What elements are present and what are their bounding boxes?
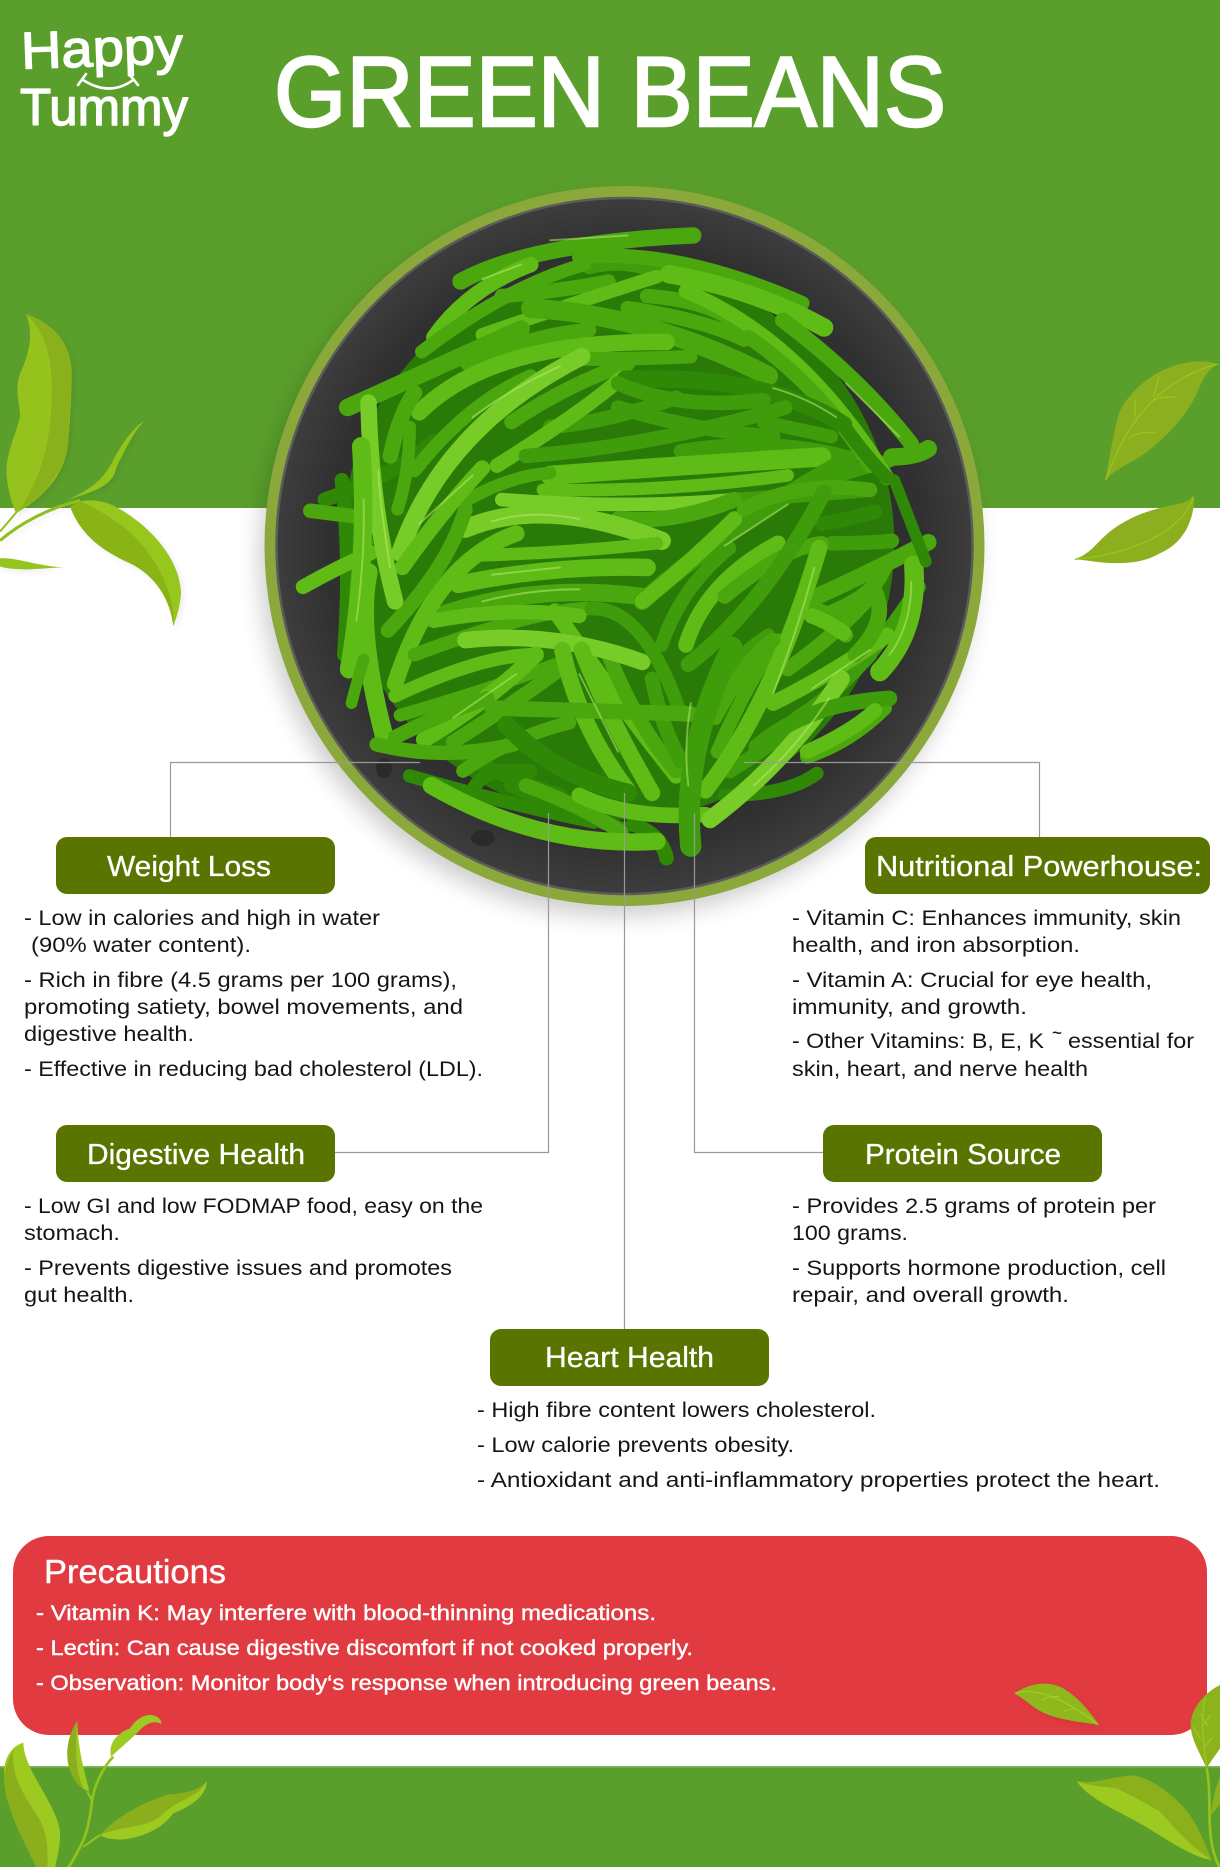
body text: - Low GI and low FODMAP food, easy on the <box>24 1195 483 1218</box>
logo: Happy Tummy <box>20 17 188 137</box>
body text: gut health. <box>24 1284 134 1307</box>
body text: - Provides 2.5 grams of protein per <box>792 1195 1156 1218</box>
connector lines <box>170 762 1040 1329</box>
pill heading: Weight Loss <box>107 851 271 883</box>
logo: Happy Tummy: Happy <box>20 17 184 81</box>
body text: 100 grams. <box>792 1222 908 1245</box>
panel: Heart Health <box>477 1329 1160 1492</box>
plate rim <box>264 186 984 906</box>
body text: - Antioxidant and anti-inflammatory properties protect the heart. <box>477 1469 1160 1492</box>
leaves: bottom left sprig <box>4 1715 207 1867</box>
body text: digestive health. <box>24 1023 194 1046</box>
precautions list: - Observation: Monitor body‘s response when introducing green beans. <box>36 1672 777 1695</box>
body text: health, and iron absorption. <box>792 934 1080 957</box>
pill heading <box>823 1125 1102 1182</box>
pill heading <box>490 1329 769 1386</box>
precautions heading: Precautions <box>44 1553 226 1590</box>
header green band <box>0 0 1220 508</box>
body text <box>477 1399 1160 1492</box>
body text: essential for <box>1068 1030 1194 1053</box>
body text <box>792 1195 1166 1307</box>
body text: repair, and overall growth. <box>792 1284 1069 1307</box>
leaves: left cluster <box>0 314 181 626</box>
pan <box>276 198 972 894</box>
precautions list: - Lectin: Can cause digestive discomfort if not cooked properly. <box>36 1637 693 1660</box>
body text: ~ <box>1052 1022 1062 1045</box>
body text: - Other Vitamins: B, E, K <box>792 1030 1044 1053</box>
body text: skin, heart, and nerve health <box>792 1058 1088 1081</box>
title: GREEN BEANS <box>274 36 946 147</box>
body text <box>24 907 483 1081</box>
leaf on precautions panel <box>1014 1684 1099 1725</box>
body text <box>24 1195 483 1307</box>
body text: - Effective in reducing bad cholesterol (LDL). <box>24 1058 483 1081</box>
body text: (90% water content). <box>31 934 251 957</box>
body text: promoting satiety, bowel movements, and <box>24 996 463 1019</box>
pill heading: Digestive Health <box>87 1139 305 1171</box>
body text: - Vitamin A: Crucial for eye health, <box>792 969 1152 992</box>
panel: Weight Loss <box>24 837 483 1081</box>
precautions list: - Vitamin K: May interfere with blood-thinning medications. <box>36 1602 656 1625</box>
pill heading: Protein Source <box>865 1139 1061 1171</box>
panel: Nutritional Powerhouse <box>792 837 1210 1081</box>
precautions list <box>36 1602 777 1695</box>
body text: - High fibre content lowers cholesterol. <box>477 1399 876 1422</box>
beans <box>303 235 928 858</box>
pill heading <box>865 837 1210 894</box>
leaves: right pair <box>1074 361 1219 563</box>
leaves: bottom right sprig <box>1077 1685 1220 1867</box>
body text: - Low in calories and high in water <box>24 907 380 930</box>
body text <box>792 907 1194 1081</box>
body text: - Supports hormone production, cell <box>792 1257 1166 1280</box>
logo: Happy Tummy: Tummy <box>20 79 188 137</box>
pill heading: Nutritional Powerhouse: <box>876 851 1202 883</box>
panel: Precautions <box>13 1536 1207 1735</box>
plate with green beans <box>260 186 984 916</box>
panel: Protein Source <box>792 1125 1166 1307</box>
body text: - Rich in fibre (4.5 grams per 100 grams), <box>24 969 457 992</box>
body text: - Low calorie prevents obesity. <box>477 1434 794 1457</box>
pill heading <box>56 1125 335 1182</box>
panel: Digestive Health <box>24 1125 483 1307</box>
body text: immunity, and growth. <box>792 996 1027 1019</box>
footer green band <box>0 1766 1220 1867</box>
body text: - Vitamin C: Enhances immunity, skin <box>792 907 1181 930</box>
body text: - Prevents digestive issues and promotes <box>24 1257 452 1280</box>
body text: stomach. <box>24 1222 120 1245</box>
pill heading <box>56 837 335 894</box>
pill heading: Heart Health <box>545 1342 714 1374</box>
